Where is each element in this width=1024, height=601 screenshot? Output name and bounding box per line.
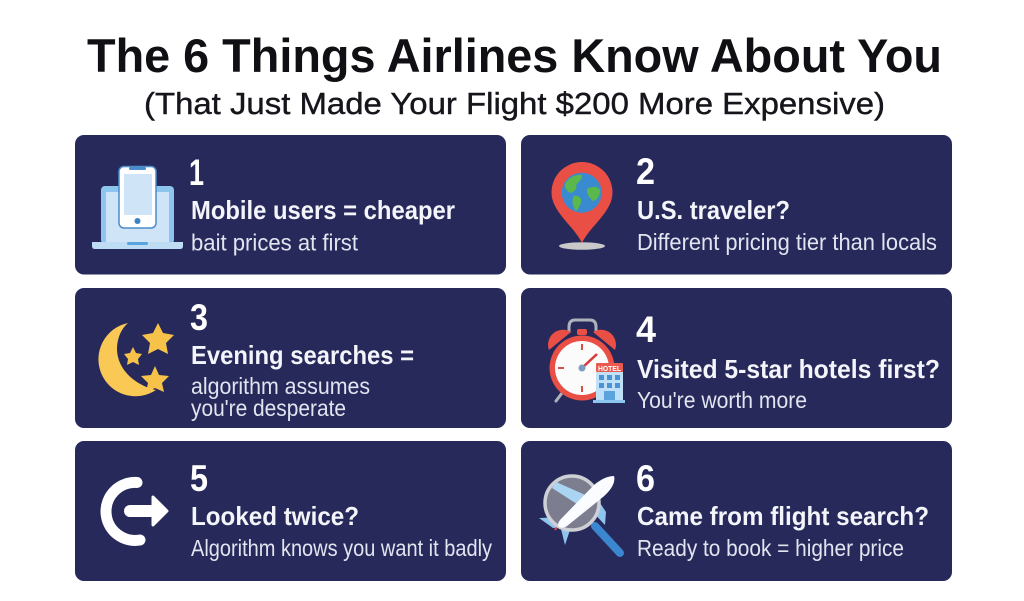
icon: moon and stars (98, 323, 174, 396)
heading: Mobile users = cheaper (191, 195, 455, 225)
description: algorithm assumes (191, 373, 370, 399)
heading: U.S. traveler? (637, 195, 790, 225)
description: Ready to book = higher price (637, 535, 904, 561)
icon: map pin with globe (552, 162, 612, 250)
heading: Came from flight search? (637, 501, 929, 531)
heading: Evening searches = (191, 340, 414, 370)
icon: alarm clock and hotel: HOTEL (598, 366, 622, 373)
panel: card 3 evening searches (75, 288, 506, 428)
description line 2: you're desperate (191, 395, 346, 421)
description: You're worth more (637, 387, 807, 413)
icon: alarm clock and hotel (548, 320, 625, 403)
subtitle: (That Just Made Your Flight $200 More Expensive) (144, 86, 885, 121)
panel: card 4 hotels (521, 288, 952, 428)
panel: card 1 mobile users (75, 135, 506, 274)
panel: card 5 looked twice (75, 441, 506, 581)
title: The 6 Things Airlines Know About You (87, 29, 942, 82)
heading: Visited 5-star hotels first? (637, 354, 940, 384)
number 4: 4 (636, 309, 656, 350)
number 5: 5 (190, 458, 208, 499)
number 2: 2 (636, 151, 655, 192)
icon: laptop and phone (92, 166, 183, 249)
heading: Looked twice? (191, 501, 359, 531)
description: Algorithm knows you want it badly (191, 535, 492, 561)
description: Different pricing tier than locals (637, 229, 937, 255)
number 1: 1 (189, 152, 204, 193)
number 3: 3 (190, 297, 208, 338)
icon: return arrow (106, 482, 167, 540)
panel: card 6 flight search (521, 441, 952, 581)
panel: card 2 U.S. traveler (521, 135, 952, 274)
description: bait prices at first (191, 230, 359, 256)
icon: magnifier and plane (539, 476, 620, 553)
number 6: 6 (636, 458, 655, 499)
